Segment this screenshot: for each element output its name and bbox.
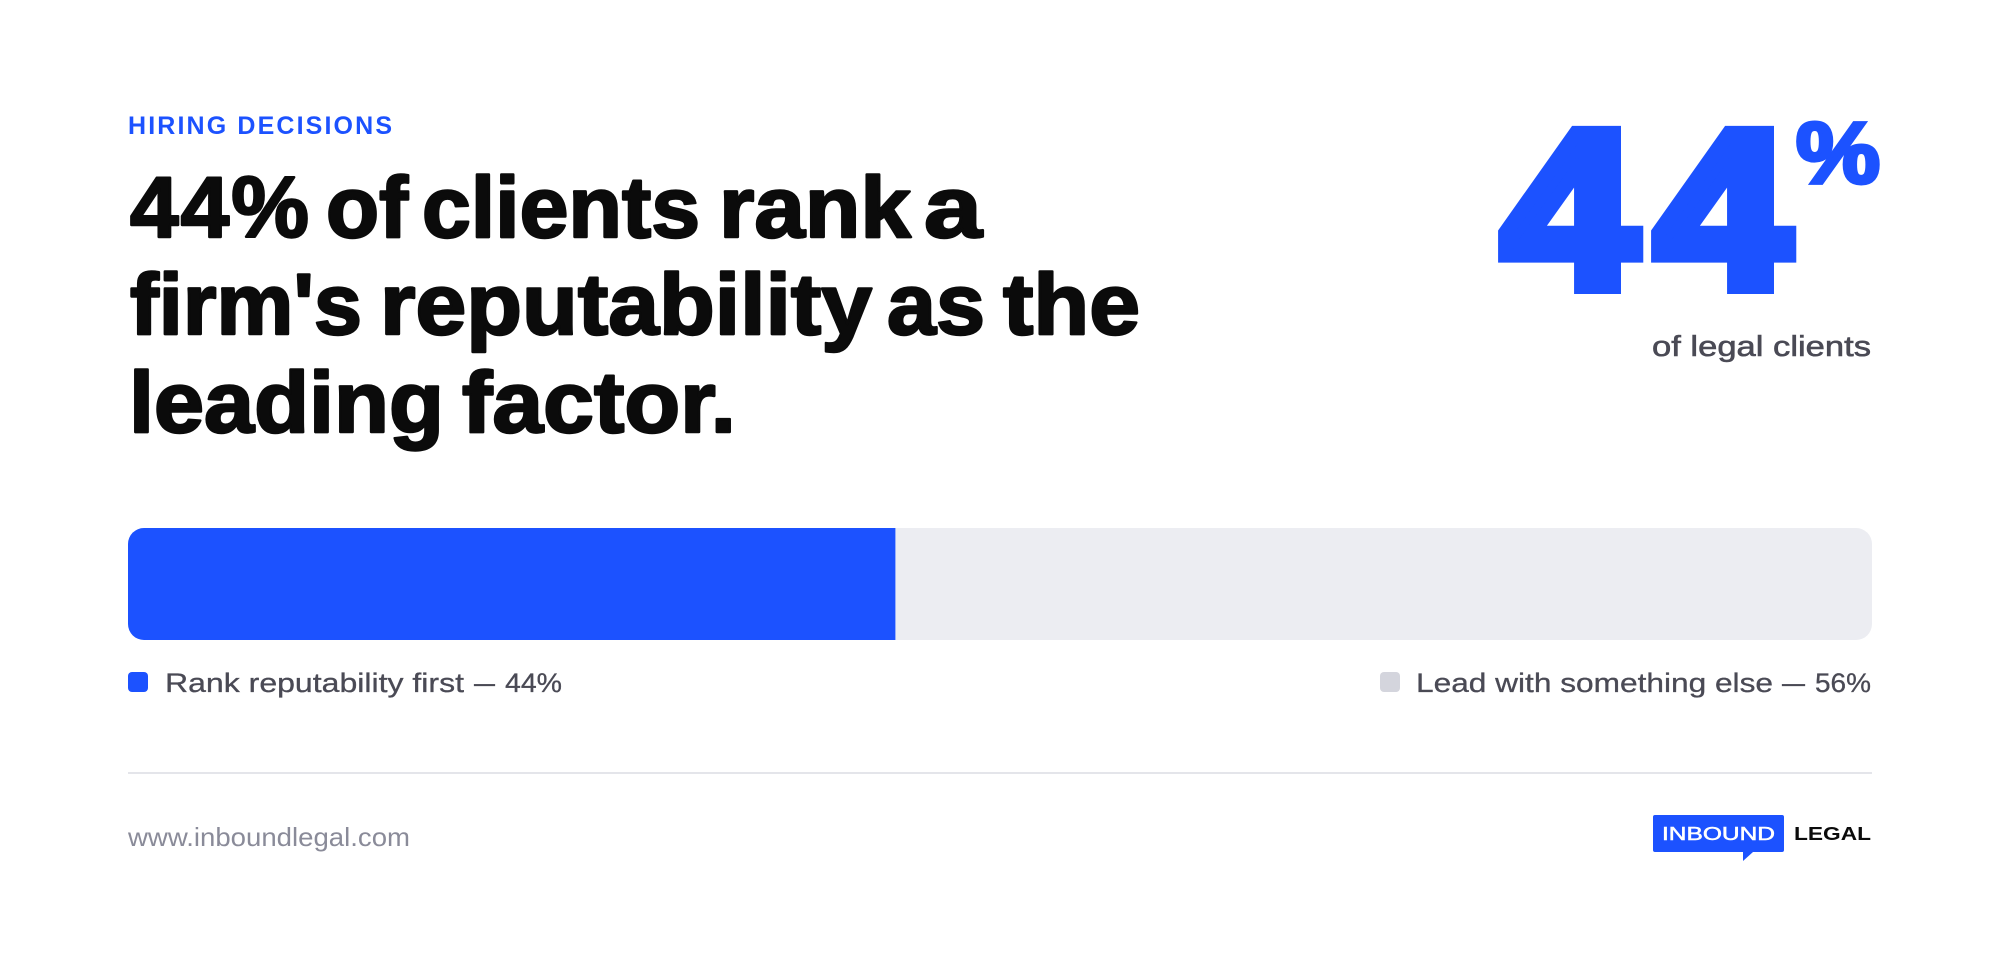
legend: something else: 56% <box>1815 668 1871 698</box>
title: factor. <box>462 355 736 451</box>
legend: reputability first: Rank reputability first <box>165 668 465 698</box>
legend: reputability first: 44% <box>505 668 562 698</box>
title: of <box>326 160 408 256</box>
title: clients <box>422 160 700 256</box>
title: a <box>924 160 983 256</box>
website url: www.inboundlegal.com <box>127 822 410 852</box>
title <box>129 160 1140 451</box>
eyebrow label: HIRING DECISIONS <box>128 112 392 140</box>
bar fill: 44% <box>128 528 895 640</box>
title: reputability <box>380 257 872 353</box>
legend: reputability first: — <box>474 668 495 698</box>
bar track: 56% <box>128 528 1872 640</box>
title: the <box>1003 257 1140 353</box>
title: 44% <box>130 160 311 256</box>
stat caption: of legal clients <box>1652 331 1871 363</box>
legend: something else <box>1380 668 1871 698</box>
logo: Inbound Legal: LEGAL <box>1794 824 1871 844</box>
big stat: 44%: 4 <box>1655 85 1790 335</box>
title: firm's <box>130 257 362 353</box>
legend: something else: — <box>1782 668 1805 698</box>
title: as <box>887 257 985 353</box>
big stat: 44%: 4 <box>1502 85 1637 335</box>
title: rank <box>719 160 911 256</box>
big stat: 44% <box>1502 85 1880 335</box>
legend: reputability first <box>128 668 562 698</box>
stacked progress bar <box>128 528 1872 640</box>
logo: Inbound Legal: INBOUND <box>1662 824 1775 844</box>
legend: something else: Lead with something else <box>1416 668 1773 698</box>
logo: Inbound Legal <box>1653 815 1871 861</box>
title: leading <box>129 355 444 451</box>
big stat: 44%: % <box>1796 106 1880 202</box>
